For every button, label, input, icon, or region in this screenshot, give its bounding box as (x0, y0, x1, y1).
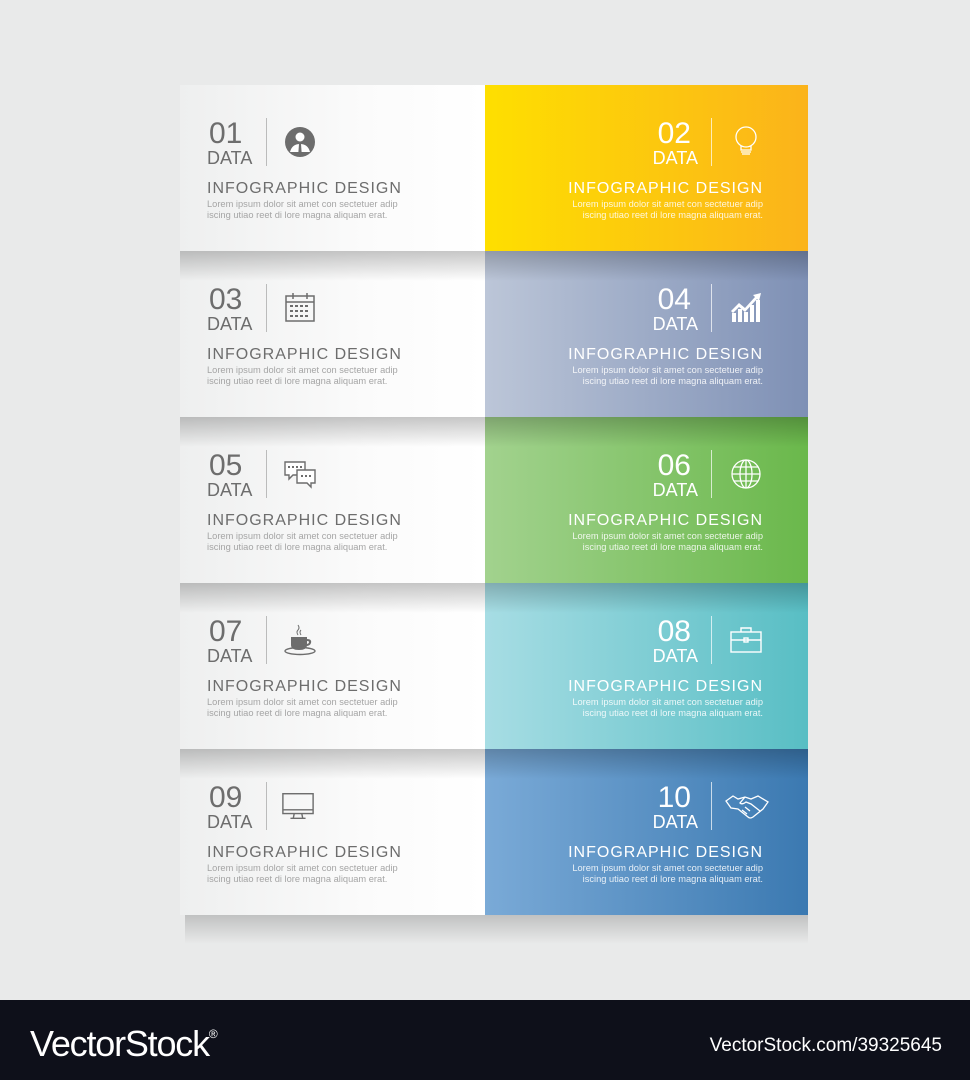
row 1 (207, 85, 808, 251)
panel 02: Lorem ipsum dolor sit amet con sectetuer adip (572, 199, 763, 209)
panel 07: DATA (207, 646, 252, 666)
panel 01: DATA (207, 148, 252, 168)
panel 06: INFOGRAPHIC DESIGN (568, 512, 763, 529)
panel 09: INFOGRAPHIC DESIGN (207, 844, 402, 861)
icon: person (285, 127, 315, 157)
panel 02: 02 (658, 117, 691, 150)
footer url: VectorStock.com/39325645 (710, 1035, 942, 1056)
panel 04: iscing utiao reet di lore magna aliquam erat. (583, 376, 763, 386)
icon: bulb (735, 126, 757, 155)
row 4 (180, 583, 808, 749)
panel 07: INFOGRAPHIC DESIGN (207, 678, 402, 695)
panel 07: Lorem ipsum dolor sit amet con sectetuer adip (207, 697, 398, 707)
panel 06: Lorem ipsum dolor sit amet con sectetuer adip (572, 531, 763, 541)
panel 08: 08 (658, 615, 691, 648)
row 2 (180, 251, 808, 417)
panel 03: Lorem ipsum dolor sit amet con sectetuer adip (207, 365, 398, 375)
panel 01: INFOGRAPHIC DESIGN (207, 180, 402, 197)
panel 09: Lorem ipsum dolor sit amet con sectetuer adip (207, 863, 398, 873)
icon: briefcase (730, 627, 762, 653)
footer logo: VectorStock® (30, 1023, 217, 1064)
row 3 (180, 417, 808, 583)
footer bar (0, 1000, 970, 1080)
panel 10: iscing utiao reet di lore magna aliquam erat. (583, 874, 763, 884)
panel 06: 06 (658, 449, 691, 482)
panel 01: 01 (209, 117, 242, 150)
panel 10: 10 (658, 781, 691, 814)
panel 02 (485, 85, 808, 251)
panel 03: DATA (207, 314, 252, 334)
panel 10: DATA (653, 812, 698, 832)
panel 10 (485, 749, 808, 915)
panel 10: Lorem ipsum dolor sit amet con sectetuer adip (572, 863, 763, 873)
panel 07 (180, 583, 485, 749)
icon: growth chart (731, 293, 761, 322)
panel 04: 04 (658, 283, 691, 316)
panel 06: DATA (653, 480, 698, 500)
icon: calendar (285, 293, 315, 322)
panel 04: INFOGRAPHIC DESIGN (568, 346, 763, 363)
panel 04: Lorem ipsum dolor sit amet con sectetuer adip (572, 365, 763, 375)
panel 07: iscing utiao reet di lore magna aliquam erat. (207, 708, 387, 718)
panel 05 (180, 417, 485, 583)
panel 07: 07 (209, 615, 242, 648)
panel 10: INFOGRAPHIC DESIGN (568, 844, 763, 861)
panel 03 (180, 251, 485, 417)
panel 09: 09 (209, 781, 242, 814)
bottom shadow (185, 914, 808, 944)
panel 08: iscing utiao reet di lore magna aliquam erat. (583, 708, 763, 718)
panel 04: DATA (653, 314, 698, 334)
panel 02: INFOGRAPHIC DESIGN (568, 180, 763, 197)
icon: handshake (725, 795, 769, 819)
panel 08: Lorem ipsum dolor sit amet con sectetuer adip (572, 697, 763, 707)
panel 05: iscing utiao reet di lore magna aliquam erat. (207, 542, 387, 552)
panel 05: Lorem ipsum dolor sit amet con sectetuer adip (207, 531, 398, 541)
panel 08 (485, 583, 808, 749)
panel 08: DATA (653, 646, 698, 666)
panel 06: iscing utiao reet di lore magna aliquam erat. (583, 542, 763, 552)
panel 01: iscing utiao reet di lore magna aliquam erat. (207, 210, 387, 220)
icon: coffee cup (284, 624, 316, 656)
panel 04 (485, 251, 808, 417)
panel 05: 05 (209, 449, 242, 482)
panel 09 (180, 749, 485, 915)
row 5 (180, 749, 808, 915)
panel 05: DATA (207, 480, 252, 500)
panel 09: iscing utiao reet di lore magna aliquam erat. (207, 874, 387, 884)
icon: chat bubbles (284, 461, 316, 489)
panel 06 (485, 417, 808, 583)
panel 05: INFOGRAPHIC DESIGN (207, 512, 402, 529)
icon: globe (731, 459, 761, 489)
icon: monitor (282, 793, 314, 819)
panel 03: INFOGRAPHIC DESIGN (207, 346, 402, 363)
panel 09: DATA (207, 812, 252, 832)
panel 02: DATA (653, 148, 698, 168)
panel 03: 03 (209, 283, 242, 316)
panel 03: iscing utiao reet di lore magna aliquam erat. (207, 376, 387, 386)
panel 01: Lorem ipsum dolor sit amet con sectetuer adip (207, 199, 398, 209)
panel 08: INFOGRAPHIC DESIGN (568, 678, 763, 695)
panel 01 (180, 85, 485, 251)
panel 02: iscing utiao reet di lore magna aliquam erat. (583, 210, 763, 220)
